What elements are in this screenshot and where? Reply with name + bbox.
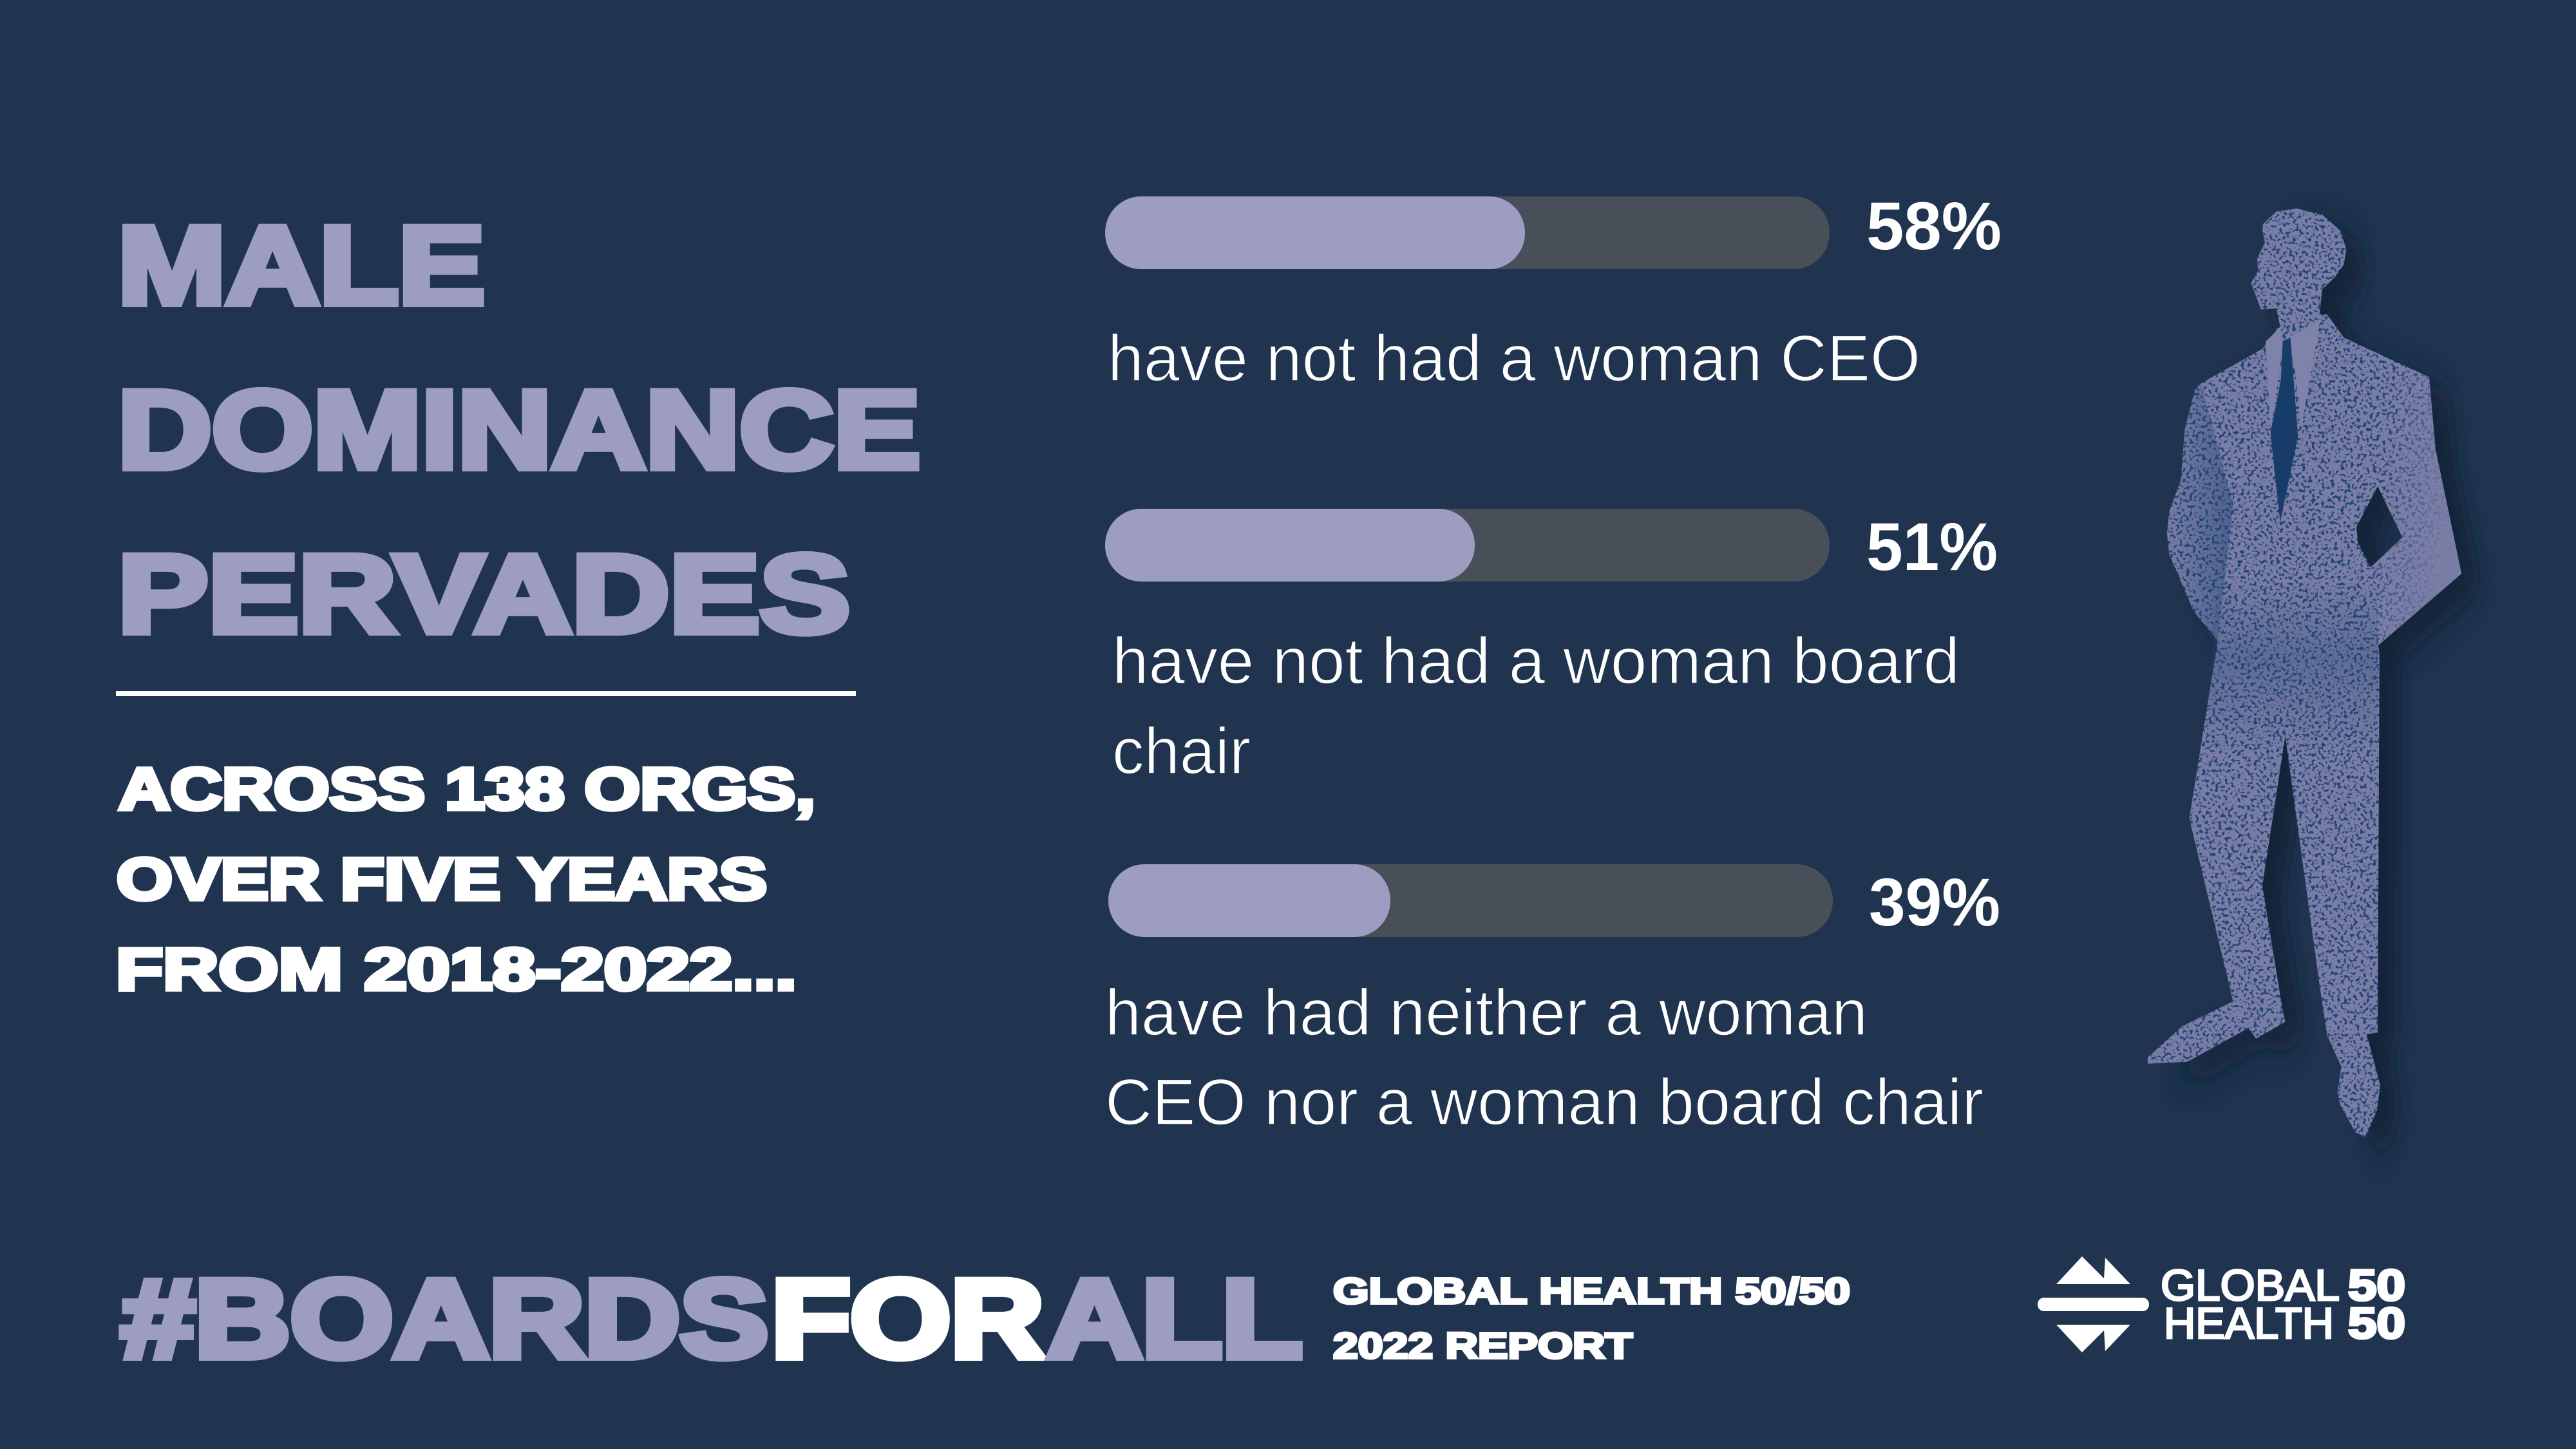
bar track 39: [1108, 864, 1833, 937]
stat: woman board chair: [1105, 509, 1998, 788]
bar fill 58: [1105, 196, 1525, 269]
hashtag: #BOARDS: [121, 1257, 768, 1381]
bar track 58: [1105, 196, 1830, 269]
title: male dominance pervades: MALE: [118, 204, 485, 327]
hashtag: [121, 1257, 1302, 1381]
label board chair: [1112, 625, 1960, 788]
tie: [2271, 337, 2298, 522]
shading overlays: [2205, 358, 2461, 755]
report label: GLOBAL HEALTH 50/50: [1333, 1271, 1850, 1312]
hashtag: FOR: [772, 1257, 1044, 1381]
logo wordmark: GLOBAL: [2161, 1261, 2340, 1310]
label board chair: have not had a woman board: [1112, 625, 1960, 697]
value 39%: 39%: [1869, 865, 2000, 940]
bar fill 51: [1105, 509, 1475, 582]
label board chair: chair: [1112, 715, 1251, 788]
stat: neither: [1105, 864, 2000, 1139]
bar track 51: [1105, 509, 1830, 582]
title underline: [116, 691, 856, 696]
logo wordmark: HEALTH: [2164, 1299, 2334, 1348]
shirt: [2266, 319, 2320, 430]
report label: 2022 REPORT: [1333, 1325, 1633, 1367]
subtitle: scope of analysis: ACROSS 138 ORGS,: [118, 757, 815, 822]
logo icon: [2038, 1256, 2149, 1352]
report label: [1333, 1271, 1850, 1367]
illustration: man in suit: [2148, 209, 2482, 1153]
figure silhouette with grain: [2148, 209, 2461, 1137]
subtitle: scope of analysis: FROM 2018-2022...: [116, 937, 797, 1003]
title: male dominance pervades: [118, 204, 920, 656]
stat: woman CEO: [1105, 189, 2002, 395]
label neither: [1105, 977, 1984, 1139]
figure shadow: [2168, 225, 2482, 1153]
label neither: CEO nor a woman board chair: [1105, 1066, 1984, 1139]
logo wordmark: 50: [2348, 1299, 2405, 1348]
title: male dominance pervades: DOMINANCE: [118, 368, 920, 492]
logo wordmark: 50: [2348, 1261, 2405, 1310]
label CEO: have not had a woman CEO: [1108, 323, 1920, 395]
label neither: have had neither a woman: [1105, 977, 1868, 1049]
subtitle: scope of analysis: OVER FIVE YEARS: [117, 847, 767, 913]
logo: Global Health 50/50: [2038, 1256, 2405, 1352]
hashtag: ALL: [1047, 1257, 1302, 1381]
title: male dominance pervades: PERVADES: [118, 532, 850, 656]
subtitle: scope of analysis: [116, 757, 815, 1003]
bar fill 39: [1108, 864, 1390, 937]
value 51%: 51%: [1866, 509, 1998, 585]
value 58%: 58%: [1866, 189, 2002, 264]
logo wordmark: [2161, 1261, 2405, 1348]
